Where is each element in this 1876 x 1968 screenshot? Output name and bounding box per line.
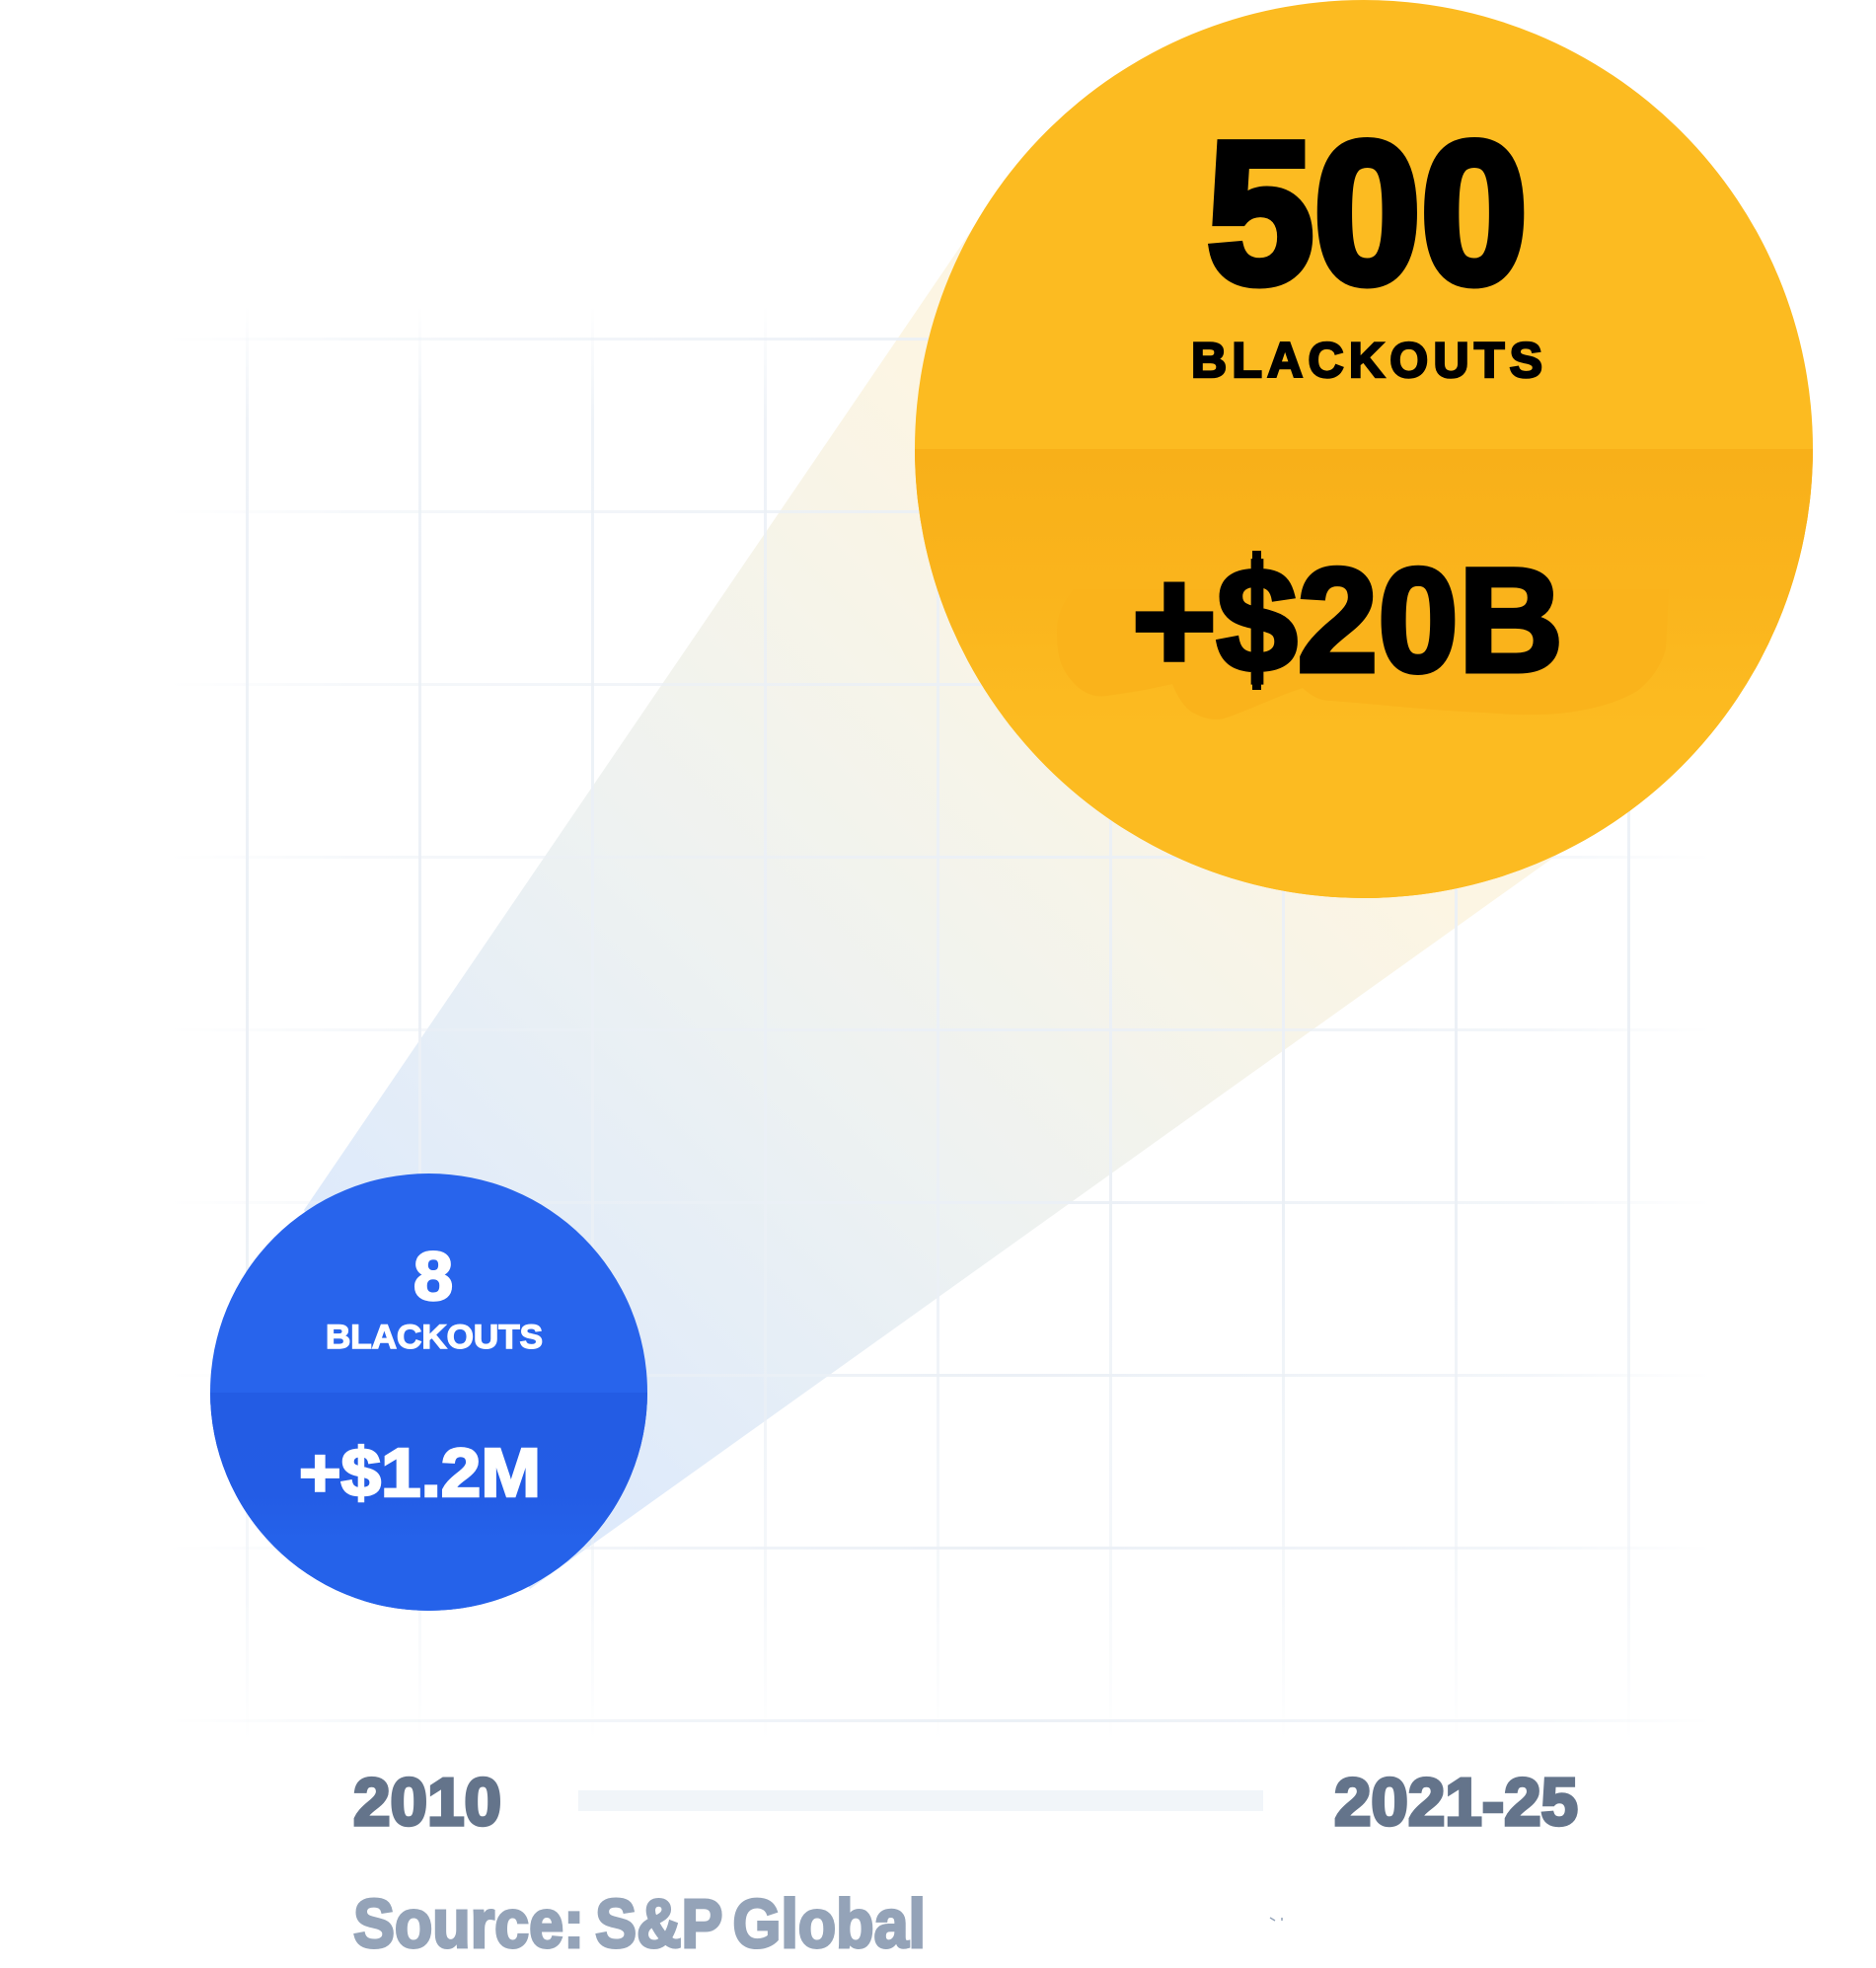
- large yellow circle: 2021-25: [915, 0, 1813, 898]
- count: 500: 500: [1207, 101, 1528, 326]
- cost: +$20B: +$20B: [1132, 537, 1563, 703]
- count: 8: 8: [413, 1238, 453, 1315]
- light blue to yellow beam connecting circles: [304, 197, 1678, 1589]
- label: BLACKOUTS: BLACKOUTS: [326, 1319, 543, 1356]
- timeline start year: 2010: 2010: [353, 1765, 501, 1840]
- source note: Source: S&P Global: [353, 1885, 926, 1962]
- cost: +$1.2M: +$1.2M: [299, 1434, 541, 1511]
- small stray mark: [1270, 1918, 1282, 1921]
- timeline bar: [578, 1790, 1263, 1811]
- label: BLACKOUTS: BLACKOUTS: [1191, 333, 1542, 388]
- small blue circle: 2010: [210, 1173, 647, 1611]
- chart grid: [168, 306, 1712, 1742]
- timeline end year: 2021-25: 2021-25: [1334, 1765, 1578, 1840]
